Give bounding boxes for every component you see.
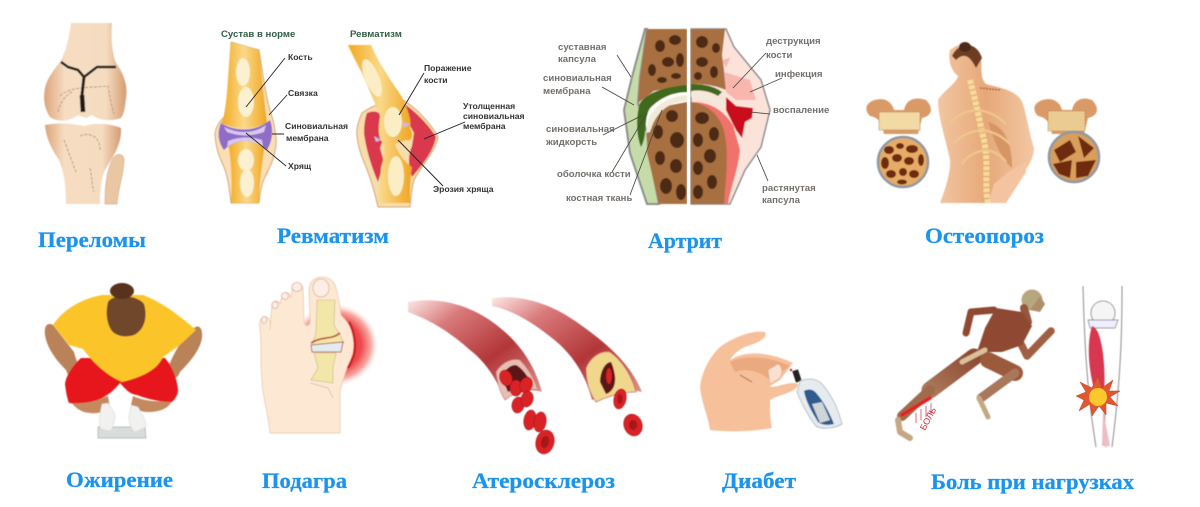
labels: мембрана [463,121,506,131]
title: atherosclerosis: Атеросклероз [472,468,615,493]
icon: porous vertebra and bone circle [1034,98,1099,182]
pointer lines [602,53,782,195]
icon: pain starburst [1076,376,1120,416]
labels: Поражение [424,63,472,73]
illustration: arthritis cross-section [543,29,829,206]
leg anatomy [1083,286,1122,447]
labels: суставная [558,42,606,53]
labels: Утолщенная [463,101,515,111]
labels: синовиальная [463,111,525,121]
labels: капсула [558,54,597,65]
icon: red blood cells [498,368,645,456]
labels [543,36,829,206]
title: fractures: Переломы [38,227,146,252]
labels: Синовиальная [285,121,348,131]
title: arthritis: Артрит [648,228,722,253]
labels [285,52,525,194]
labels: инфекция [775,69,822,80]
labels: мембрана [286,133,329,143]
pain arrows [916,403,931,423]
labels: кости [766,50,792,61]
illustration: rheumatism joints diagram [215,29,525,207]
rheumatism joint drawing [348,45,438,207]
labels: деструкция [766,36,821,47]
labels: мембрана [543,86,591,97]
illustration: obese person on scale [45,283,202,438]
pain label: БОЛЬ [918,406,938,432]
labels: Связка [288,88,318,98]
title: osteoporosis: Остеопороз [925,223,1044,248]
labels: синовиальная [546,124,615,135]
labels: оболочка кости [557,169,631,180]
labels: Эрозия хряща [433,184,494,194]
normal joint drawing [215,42,276,203]
labels: костная ткань [566,193,632,204]
title: rheumatism: Ревматизм [277,223,389,248]
illustration: gout foot [259,277,379,433]
illustration: osteoporosis back [866,42,1099,203]
labels: капсула [762,195,801,206]
labels: растянутая [762,183,816,194]
labels: Хрящ [288,161,312,171]
illustration: atherosclerosis arteries [408,297,645,456]
labels: синовиальная [543,73,612,84]
illustration: runner and leg with pain [898,286,1122,447]
heading: rheumatism joint: Ревматизм [350,29,402,40]
labels: Кость [288,52,313,62]
labels: кости [424,75,448,85]
heading: normal joint: Сустав в норме [221,29,295,40]
illustration: diabetes hand and glucose meter [700,332,842,431]
icon: dense vertebra and bone circle [866,98,931,187]
labels: жидкорсть [545,137,597,148]
title: diabetes: Диабет [722,468,796,493]
icon: starburst centre [1089,388,1107,406]
pointer lines [246,58,465,186]
illustration: fractured knee [44,23,127,204]
title: pain under load: Боль при нагрузках [931,469,1134,494]
title: obesity: Ожирение [66,467,173,492]
title: gout: Подагра [262,468,347,493]
labels: воспаление [773,105,829,116]
